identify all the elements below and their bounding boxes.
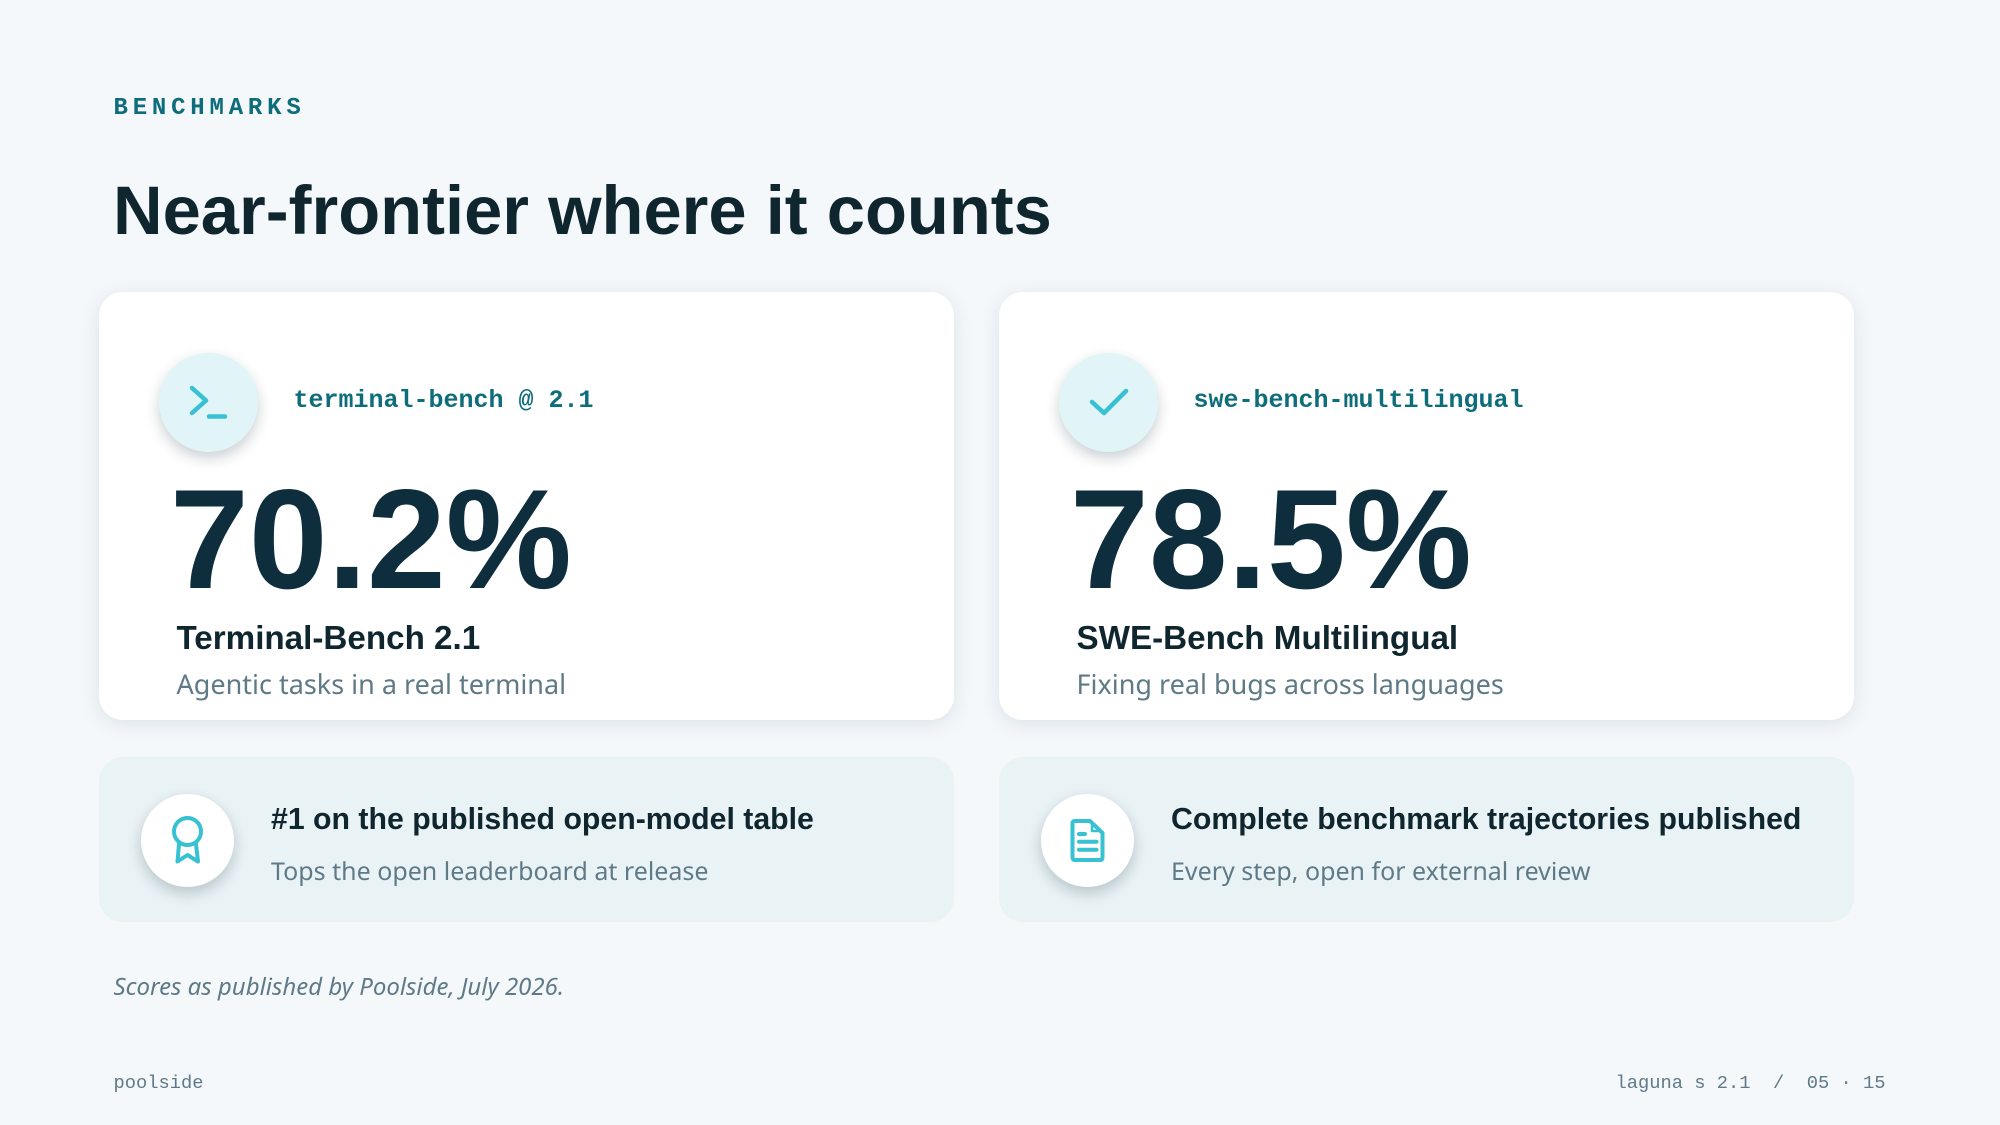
icon: document (1041, 794, 1134, 887)
callout text: Tops the open leaderboard at release (271, 854, 708, 888)
score: 70.2% (170, 461, 572, 619)
benchmark tag: terminal-bench @ 2.1 (294, 386, 594, 414)
footer: page number: laguna s 2.1 / 05 · 15 (1615, 1072, 1886, 1094)
panel: swe-bench card (999, 292, 1854, 720)
benchmark tag: swe-bench-multilingual (1194, 386, 1524, 414)
benchmark name: Terminal-Bench 2.1 (176, 620, 480, 656)
score: 78.5% (1070, 461, 1472, 619)
callout text: Every step, open for external review (1171, 854, 1591, 888)
benchmark description: Fixing real bugs across languages (1076, 665, 1504, 702)
callout heading: #1 on the published open-model table (271, 803, 814, 836)
title: Near-frontier where it counts (113, 172, 1052, 248)
benchmark name: SWE-Bench Multilingual (1076, 620, 1458, 656)
icon: terminal prompt (159, 352, 258, 452)
benchmark description: Agentic tasks in a real terminal (176, 665, 566, 702)
icon: check mark (1059, 352, 1158, 452)
panel: open-model table callout (99, 757, 954, 922)
panel: trajectories callout (999, 757, 1854, 922)
source note: Scores as published by Poolside, July 2026. (114, 970, 564, 1003)
callout heading: Complete benchmark trajectories published (1171, 803, 1801, 836)
icon: award ribbon (141, 794, 234, 887)
eyebrow: BENCHMARKS: BENCHMARKS (114, 94, 306, 122)
panel: terminal-bench card (99, 292, 954, 720)
footer: brand: poolside (114, 1072, 204, 1094)
